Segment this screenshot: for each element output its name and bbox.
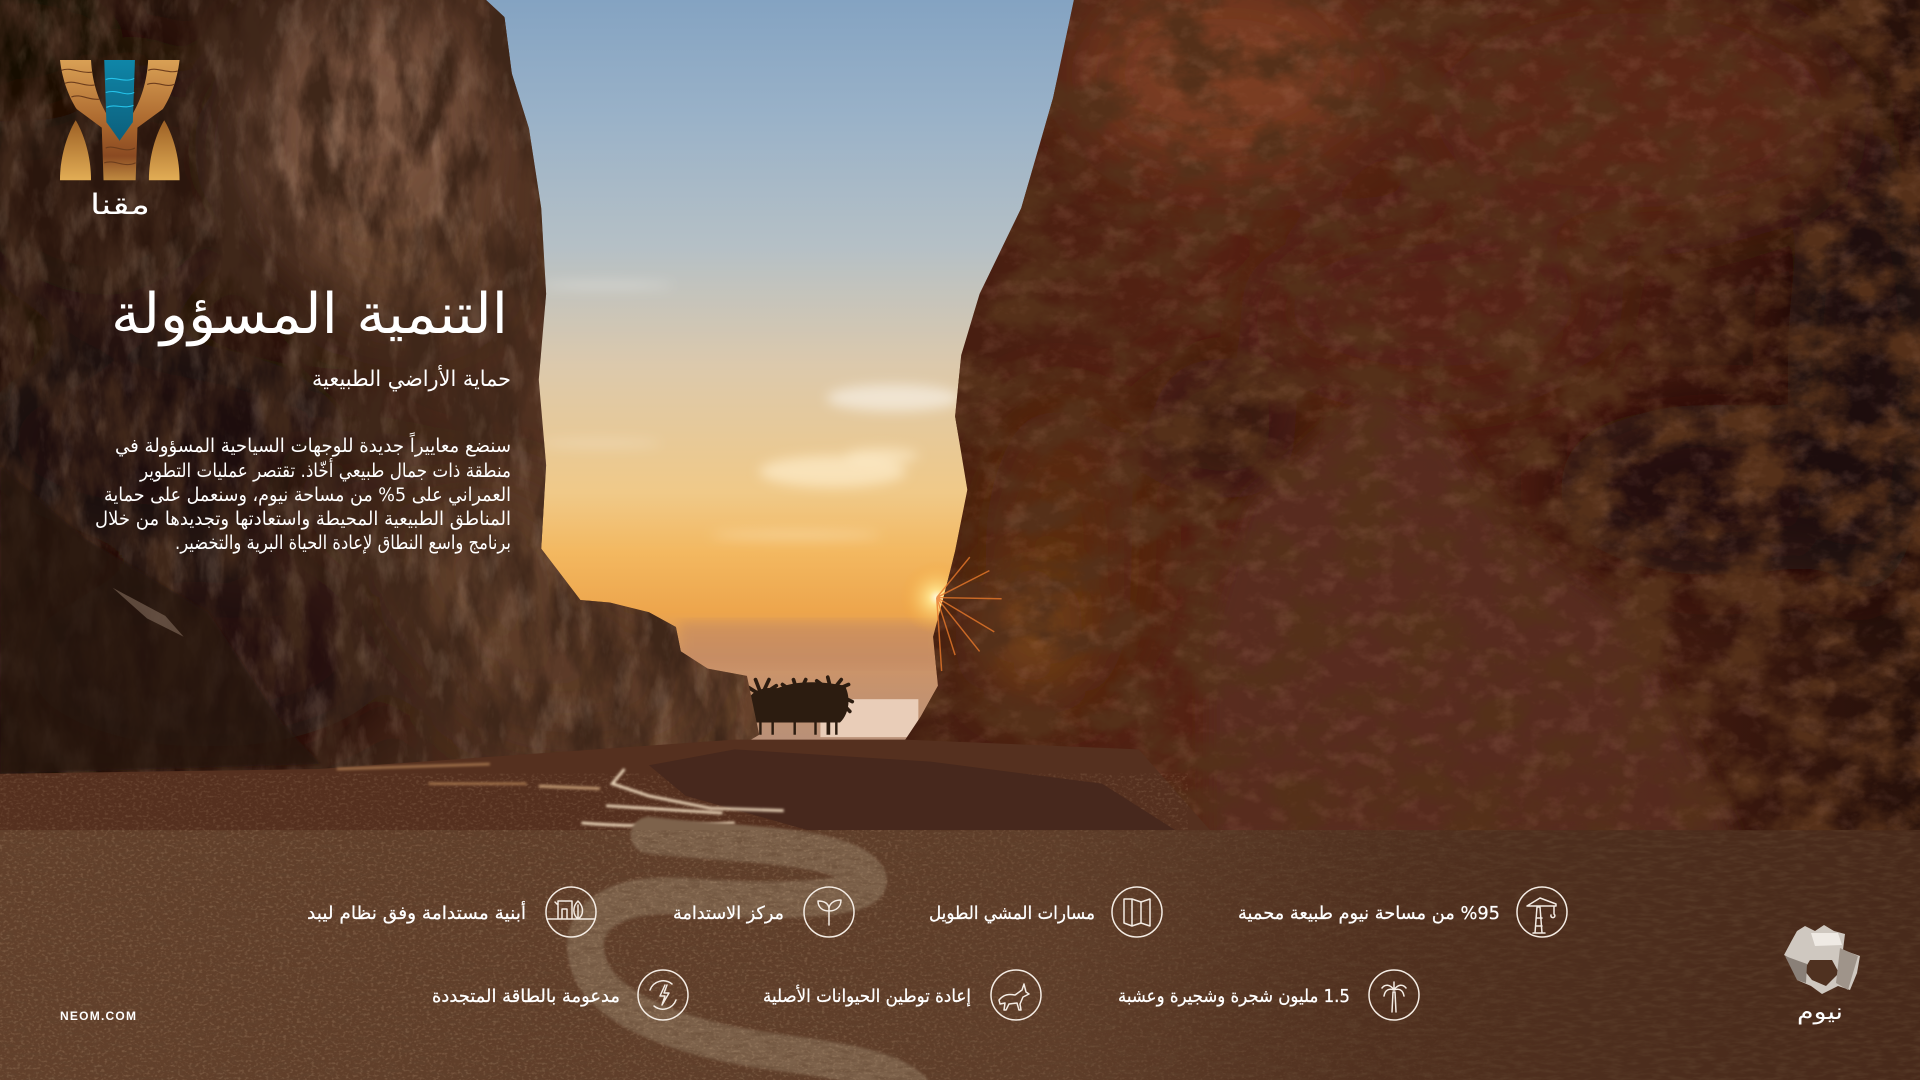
lower sloped rock face [1206,388,1739,845]
logo wordmark: مقنا [90,188,150,221]
icon: recycling bolt [638,970,688,1020]
palm trees [744,677,852,735]
speckled sand texture [0,830,1338,1080]
logo: Maqna [60,60,180,221]
feature: 1.5 million trees [1118,970,1419,1020]
body text [95,432,511,554]
foreground boulder [0,465,321,774]
label: أبنية مستدامة وفق نظام ليبد [307,901,526,924]
feature: LEED buildings [307,887,596,937]
label: مدعومة بالطاقة المتجددة [432,986,620,1007]
label: مسارات المشي الطويل [929,903,1095,924]
stream under panel [585,835,912,1080]
icon: map [1112,887,1162,937]
website: NEOM.COM [60,1009,136,1023]
icon: fox [991,970,1041,1020]
label: إعادة توطين الحيوانات الأصلية [763,985,971,1007]
icon: crane [1517,887,1567,937]
body text: سنضع معاييراً جديدة للوجهات السياحية المسؤولة في [115,432,511,457]
body text: المناطق الطبيعية المحيطة واستعادتها وتجديدها من خلال [95,508,511,530]
lower panel ground [0,830,1920,1080]
logo: NEOM [1784,925,1860,1025]
feature: native wildlife [763,970,1041,1020]
feature: sustainability centre [673,887,854,937]
subtitle: حماية الأراضي الطبيعية [312,365,511,392]
body text: برنامج واسع النطاق لإعادة الحياة البرية والتخضير. [175,532,511,554]
icon: sprout [804,887,854,937]
sun rays [937,557,1002,671]
label: 1.5 مليون شجرة وشجيرة وعشبة [1118,986,1350,1007]
left cliff [0,0,784,784]
feature: 95% protected [1238,887,1567,937]
label: مركز الاستدامة [673,903,784,924]
clouds [539,282,961,540]
sun [900,561,973,634]
label: %95 من مساحة نيوم طبيعة محمية [1238,903,1500,924]
distant haze band [680,622,943,666]
mound by stream [649,749,1176,830]
feature: hiking trails [929,887,1162,937]
icon: palm tree [1369,970,1419,1020]
sea [820,699,918,737]
logo mark [60,60,180,180]
ground [0,740,1212,833]
icon: building and leaf [546,887,596,937]
body text: منطقة ذات جمال طبيعي أخّاذ. تقتصر عمليات التطوير [139,458,511,482]
sky [465,0,1102,747]
wordmark: نيوم [1797,1000,1843,1025]
star mark [1784,925,1860,994]
body text: العمراني على 5% من مساحة نيوم، وسنعمل على حماية [104,484,511,506]
water reflections [337,764,784,826]
title: التنمية المسؤولة [111,282,508,347]
right cliff [894,0,1920,845]
feature: renewable energy [432,970,688,1020]
